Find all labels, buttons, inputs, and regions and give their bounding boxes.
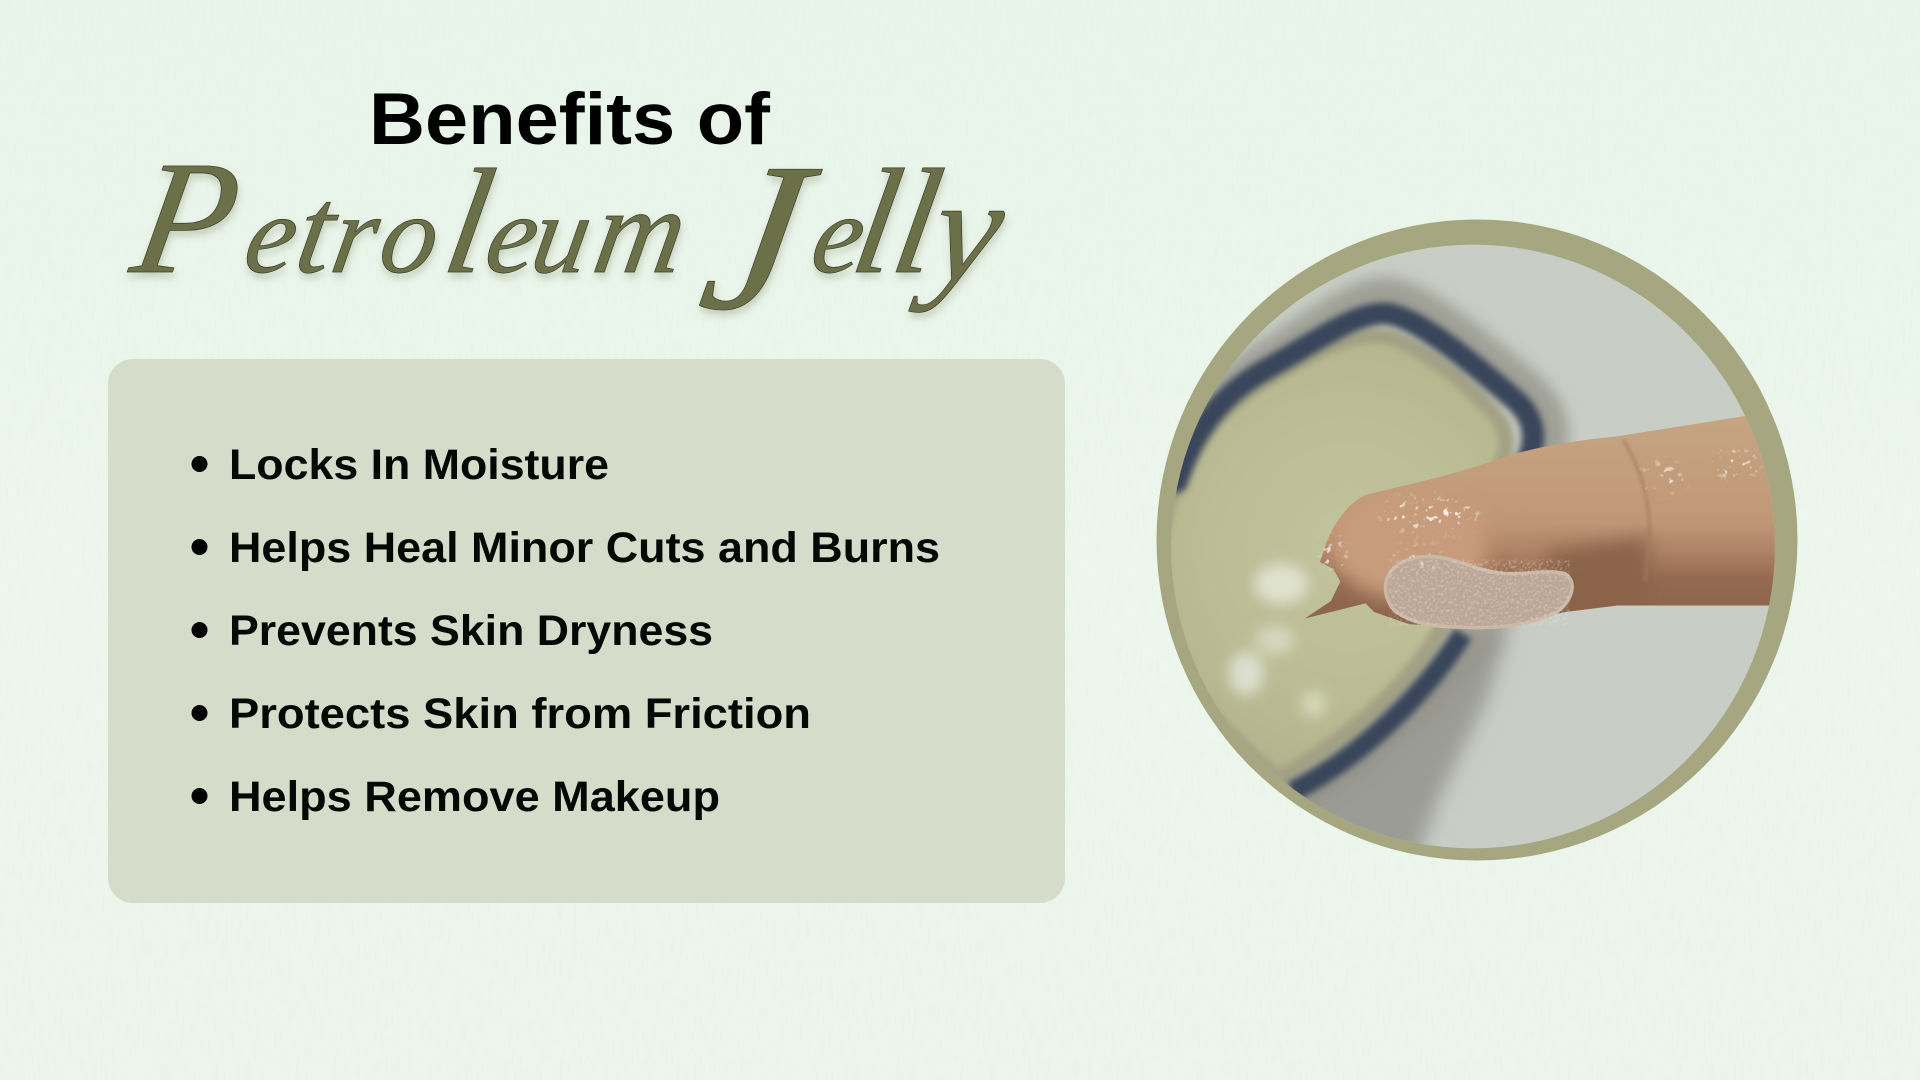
title: Petroleum Jelly script: u <box>524 173 602 297</box>
jelly highlights <box>1313 443 1769 573</box>
jar interior <box>1149 335 1506 779</box>
jar rim <box>1177 313 1533 482</box>
title: Petroleum Jelly script: e <box>478 173 549 297</box>
fingertip tone <box>1327 522 1490 607</box>
jar rim halo <box>1162 299 1547 799</box>
jar rim lower <box>1292 634 1463 792</box>
title: Petroleum Jelly script: e <box>237 173 308 297</box>
title: Petroleum Jelly script: y <box>908 146 1018 313</box>
title: Petroleum Jelly script: r <box>324 173 390 297</box>
benefit item: Locks In Moisture: Locks In Moisture <box>229 441 609 489</box>
circular photo: fingertip with petroleum jelly over a jar <box>1156 220 1798 860</box>
jar shadow on surface <box>1306 627 1516 845</box>
benefit item: Helps Remove Makeup: Helps Remove Makeup <box>229 773 720 821</box>
benefit item: Protects Skin from Friction: Protects Skin from Friction <box>229 690 811 738</box>
title: Benefits of: Benefits of <box>369 79 771 160</box>
photo illustration <box>1171 244 1775 848</box>
title: Petroleum Jelly script: P <box>121 129 252 308</box>
title: Petroleum Jelly script: J <box>687 120 832 355</box>
title: Petroleum Jelly script: o <box>372 173 450 297</box>
title: Petroleum Jelly script: m <box>585 163 728 299</box>
finger dark underside <box>1548 536 1648 616</box>
finger <box>1305 413 1782 634</box>
jelly lump <box>1385 557 1572 628</box>
finger crease <box>1624 441 1650 582</box>
title: Petroleum Jelly script: l <box>434 138 505 305</box>
title: Petroleum Jelly script: l <box>882 138 953 305</box>
title: Petroleum Jelly script: t <box>287 163 349 300</box>
photo ring <box>1156 220 1798 860</box>
panel: benefits list <box>108 359 1065 903</box>
title: Petroleum Jelly script <box>112 120 1022 355</box>
benefit item: Helps Heal Minor Cuts and Burns: Helps Heal Minor Cuts and Burns <box>229 524 940 572</box>
benefit item: Prevents Skin Dryness: Prevents Skin Dryness <box>229 607 713 655</box>
title: Petroleum Jelly script: l <box>842 138 913 305</box>
title: Petroleum Jelly script: e <box>804 173 875 297</box>
jelly smears <box>1229 564 1326 717</box>
